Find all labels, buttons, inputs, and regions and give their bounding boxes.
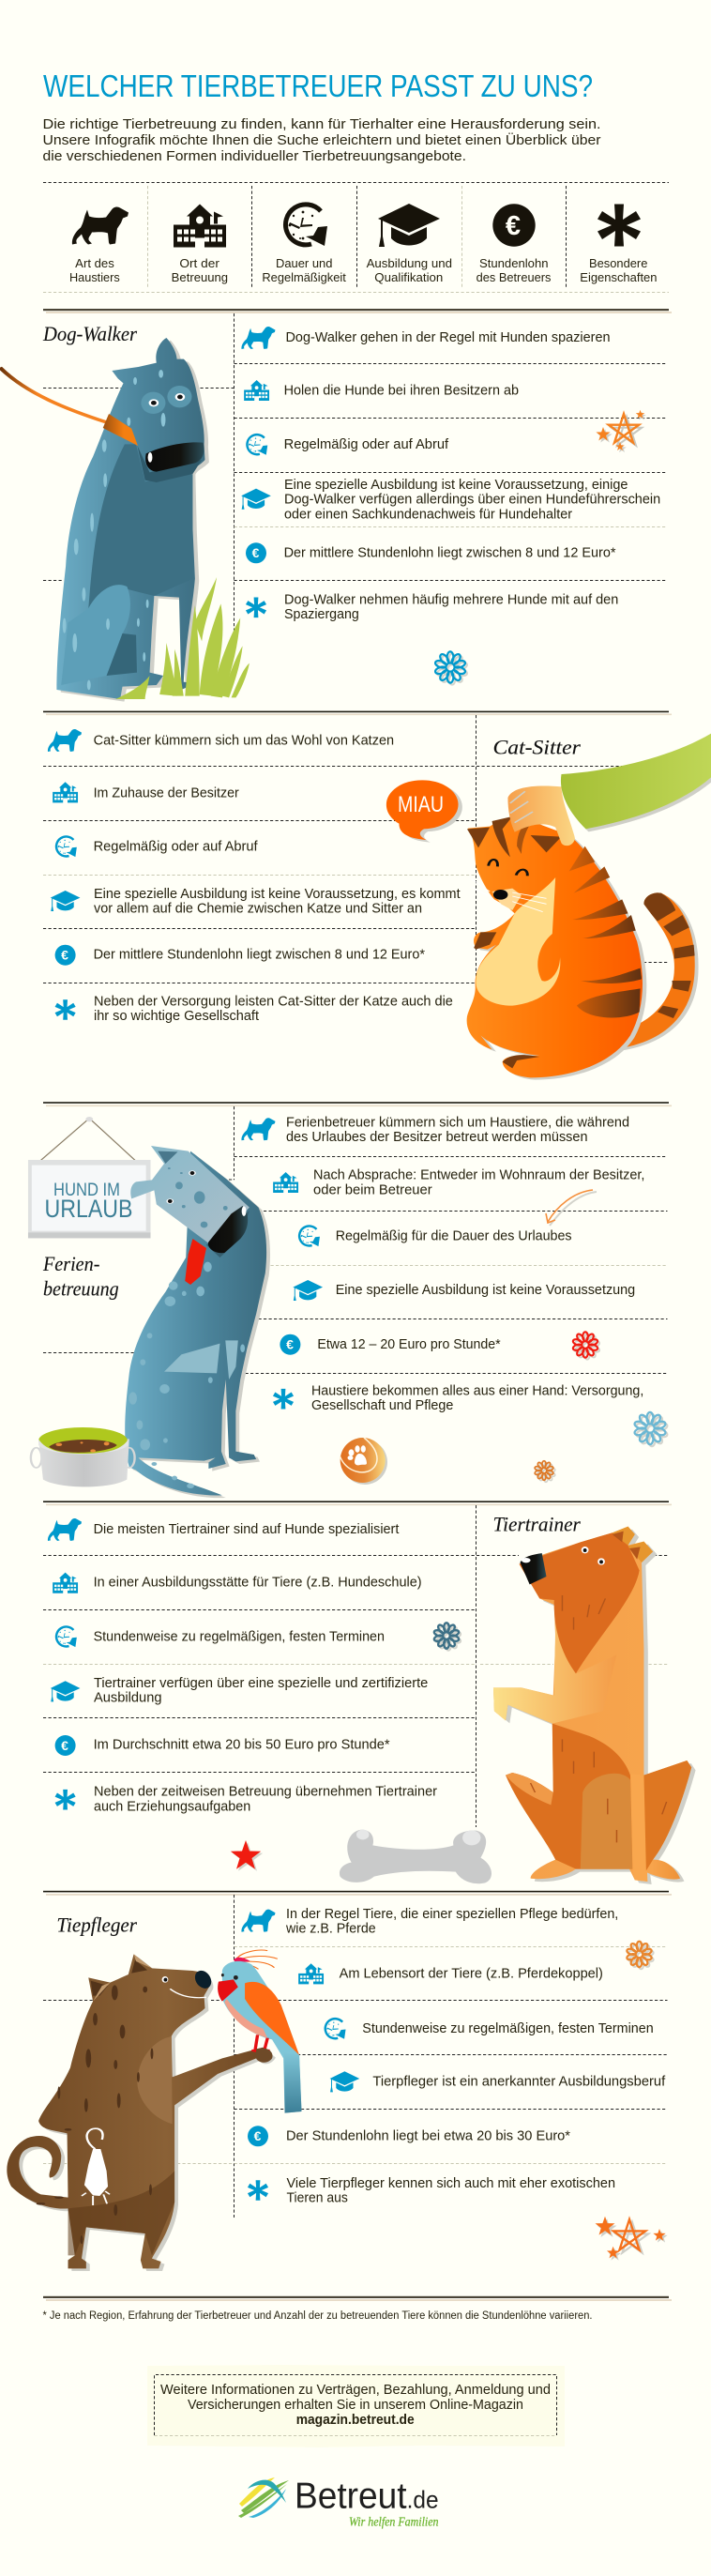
panel: Tierpfleger: Tierpfleger ist ein anerkannter Ausbildungsberuf <box>372 2074 666 2089</box>
heading: Dog-Walker <box>42 322 137 345</box>
legend labels: Regelmäßigkeit <box>262 270 346 284</box>
panel: Tiertrainer: auch Erziehungsaufgaben <box>94 1799 250 1814</box>
icon: euro <box>492 204 536 247</box>
sign text: HUND IM <box>53 1181 120 1200</box>
row icons and text <box>48 1518 82 1541</box>
panel: Tierpfleger: Der Stundenlohn liegt bei etwa 20 bis 30 Euro* <box>286 2128 570 2143</box>
panel: Ferienbetreuung: Nach Absprache: Entweder im Wohnraum der Besitzer, <box>313 1168 644 1183</box>
sign text <box>45 1181 133 1223</box>
intro text: Unsere Infografik möchte Ihnen die Suche erleichtern und bietet einen Überblick über <box>43 131 601 148</box>
sign text: URLAUB <box>45 1195 133 1223</box>
callout: MIAU <box>386 780 462 843</box>
panel: Dog-Walker: Der mittlere Stundenlohn liegt zwischen 8 und 12 Euro* <box>284 545 616 560</box>
callout: more information: magazin.betreut.de <box>296 2413 415 2428</box>
panel: Tiertrainer: Im Durchschnitt etwa 20 bis 50 Euro pro Stunde* <box>94 1738 390 1753</box>
legend labels: Art des <box>75 256 114 270</box>
heading: Tiepfleger <box>56 1913 137 1936</box>
decoration: orange stars <box>596 410 646 452</box>
panel: Tiertrainer <box>43 1501 696 1884</box>
panel: Dog-Walker: Regelmäßig oder auf Abruf <box>284 437 449 452</box>
legend labels: Stundenlohn <box>479 256 548 270</box>
panel: Tiertrainer: Stundenweise zu regelmäßigen, festen Terminen <box>94 1629 385 1644</box>
callout: more information: Weitere Informationen zu Verträgen, Bezahlung, Anmeldung und <box>160 2383 551 2398</box>
panel: legend <box>43 182 669 293</box>
heading: Tiertrainer <box>493 1513 581 1536</box>
footer rule <box>43 2296 672 2301</box>
icon: school <box>174 205 226 248</box>
decoration: blue flower <box>434 651 468 685</box>
row icons and text <box>48 729 82 752</box>
panel: Cat-Sitter: MIAU <box>398 792 444 817</box>
legend labels: Dauer und <box>276 256 332 270</box>
ball with paw <box>340 1438 387 1485</box>
decoration: bone <box>340 1830 492 1883</box>
grass <box>115 577 250 699</box>
panel: Cat-Sitter: Eine spezielle Ausbildung ist keine Voraussetzung, es kommt <box>94 887 461 902</box>
callout: more information: Versicherungen erhalten Sie in unserem Online-Magazin <box>188 2398 523 2413</box>
decoration: orange stars <box>596 2217 668 2261</box>
icon: clock <box>285 205 327 246</box>
panel: Cat-Sitter: Neben der Versorgung leisten Cat-Sitter der Katze auch die <box>94 994 453 1009</box>
panel: Ferienbetreuung: Etwa 12 – 20 Euro pro Stunde* <box>317 1337 501 1352</box>
panel: Cat-Sitter: Regelmäßig oder auf Abruf <box>94 839 259 854</box>
icon: graduation cap <box>378 204 440 247</box>
panel: Dog-Walker: Dog-Walker gehen in der Regel mit Hunden spazieren <box>285 330 610 345</box>
legend labels: Qualifikation <box>374 270 443 284</box>
panel: Tierpfleger: Stundenweise zu regelmäßigen, festen Terminen <box>362 2021 654 2036</box>
illustration: cat with hand and speech bubble <box>386 734 711 1080</box>
illustration: brown dog with parrot <box>7 1950 301 2271</box>
footnote: * Je nach Region, Erfahrung der Tierbetreuer und Anzahl der zu betreuenden Tiere können die Stundenlöhne variieren. <box>43 2310 593 2322</box>
panel: Dog-Walker: Dog-Walker nehmen häufig mehrere Hunde mit auf den <box>284 592 618 607</box>
logo: Betreut.de: Betreut <box>295 2477 407 2517</box>
intro text: die verschiedenen Formen individueller Tierbetreuungsangebote. <box>43 149 466 164</box>
panel: Tierpfleger: In der Regel Tiere, die einer speziellen Pflege bedürfen, <box>286 1907 618 1922</box>
decoration: teal flower <box>433 1623 461 1651</box>
row icons and text <box>241 1910 276 1932</box>
heading: Ferien- <box>42 1252 99 1275</box>
panel: Cat-Sitter: Der mittlere Stundenlohn liegt zwischen 8 und 12 Euro* <box>94 948 425 963</box>
icon: asterisk <box>598 205 641 246</box>
decoration: orange flower <box>627 1942 654 1969</box>
panel: Dog-Walker: Dog-Walker verfügen allerdings über einen Hundeführerschein <box>284 493 660 508</box>
legend labels: Eigenschaften <box>580 270 657 284</box>
heading <box>42 1252 119 1301</box>
panel: Dog-Walker: oder einen Sachkundenachweis für Hundehalter <box>284 507 572 522</box>
row icons and text <box>241 327 276 349</box>
title: WELCHER TIERBETREUER PASST ZU UNS? <box>43 69 593 104</box>
panel: Dog-Walker: Eine spezielle Ausbildung ist keine Voraussetzung, einige <box>284 478 628 493</box>
panel: Cat-Sitter <box>43 711 711 1080</box>
callout: more information <box>147 2365 565 2447</box>
parrot <box>218 1950 301 2113</box>
panel: Ferienbetreuung: des Urlaubes der Besitzer betreut werden müssen <box>286 1130 587 1145</box>
legend labels: Betreuung <box>172 270 228 284</box>
panel: Ferienbetreuung: oder beim Betreuer <box>313 1182 432 1197</box>
logo swoosh <box>238 2477 289 2518</box>
panel: Cat-Sitter: ihr so wichtige Gesellschaft <box>94 1009 259 1024</box>
legend labels: Ausbildung und <box>367 256 452 270</box>
heading: betreuung <box>43 1277 119 1301</box>
legend labels: des Betreuers <box>477 270 552 284</box>
panel: Ferienbetreuung: Regelmäßig für die Dauer des Urlaubes <box>336 1228 572 1243</box>
decoration: red star <box>231 1840 263 1871</box>
illustration: orange dog <box>493 1527 696 1884</box>
panel: Tierpfleger: Am Lebensort der Tiere (z.B. Pferdekoppel) <box>340 1966 603 1981</box>
panel: Tiertrainer: Die meisten Tiertrainer sind auf Hunde spezialisiert <box>94 1522 399 1537</box>
panel: Tiertrainer: Tiertrainer verfügen über eine spezielle und zertifizierte <box>94 1676 428 1691</box>
panel: Tiertrainer: € <box>61 1738 68 1753</box>
panel: Cat-Sitter: Im Zuhause der Besitzer <box>94 785 239 800</box>
panel: Ferienbetreuung: Haustiere bekommen alles aus einer Hand: Versorgung, <box>311 1384 643 1399</box>
logo: Betreut.de: Wir helfen Familien <box>349 2516 439 2530</box>
panel: Dog-Walker: Spaziergang <box>284 607 359 622</box>
panel: Dog-Walker: Holen die Hunde bei ihren Besitzern ab <box>284 383 519 398</box>
panel: Ferienbetreuung: € <box>286 1336 294 1351</box>
row icons and text <box>241 1118 276 1140</box>
heading: Cat-Sitter <box>493 735 581 758</box>
panel: Cat-Sitter: € <box>61 948 68 963</box>
panel: Ferienbetreuung: Eine spezielle Ausbildung ist keine Voraussetzung <box>336 1283 635 1298</box>
panel: Tiertrainer: In einer Ausbildungsstätte für Tiere (z.B. Hundeschule) <box>94 1576 422 1591</box>
arrow <box>546 1190 597 1226</box>
legend labels: Haustiers <box>69 270 120 284</box>
decoration: flowers <box>535 1332 668 1482</box>
panel: Tierpfleger: wie z.B. Pferde <box>285 1922 376 1937</box>
panel: Tiertrainer: Neben der zeitweisen Betreuung übernehmen Tiertrainer <box>94 1785 437 1800</box>
panel: Dog-Walker: € <box>252 545 260 560</box>
panel: Ferienbetreuung: Ferienbetreuer kümmern sich um Haustiere, die während <box>286 1116 629 1131</box>
illustration: dog, sign and bowl <box>28 1117 270 1498</box>
panel: Tiertrainer: Ausbildung <box>94 1691 161 1706</box>
panel: Tierpfleger <box>7 1891 672 2271</box>
panel: Cat-Sitter: Cat-Sitter kümmern sich um das Wohl von Katzen <box>94 734 394 749</box>
logo: Betreut.de: .de <box>407 2486 439 2514</box>
food bowl <box>31 1427 135 1486</box>
logo: Betreut.de <box>238 2477 439 2530</box>
intro text: Die richtige Tierbetreuung zu finden, kann für Tierhalter eine Herausforderung sein. <box>43 117 600 132</box>
panel: Tierpfleger: Tieren aus <box>287 2191 348 2206</box>
panel: Ferienbetreuung: Gesellschaft und Pflege <box>311 1398 453 1413</box>
panel: Tierpfleger: Viele Tierpfleger kennen sich auch mit eher exotischen <box>287 2176 615 2191</box>
panel: Dog-Walker <box>0 309 672 702</box>
illustration: blue dog with leash <box>0 338 250 702</box>
panel: Cat-Sitter: vor allem auf die Chemie zwischen Katze und Sitter an <box>94 902 422 917</box>
legend labels: Ort der <box>179 256 220 270</box>
panel: Ferienbetreuung <box>28 1102 672 1498</box>
intro text <box>43 117 601 164</box>
panel: Tierpfleger: € <box>254 2128 262 2143</box>
legend labels <box>69 256 657 284</box>
icon: euro: € <box>506 211 521 241</box>
legend labels: Besondere <box>589 256 647 270</box>
icon: dog <box>72 206 129 244</box>
